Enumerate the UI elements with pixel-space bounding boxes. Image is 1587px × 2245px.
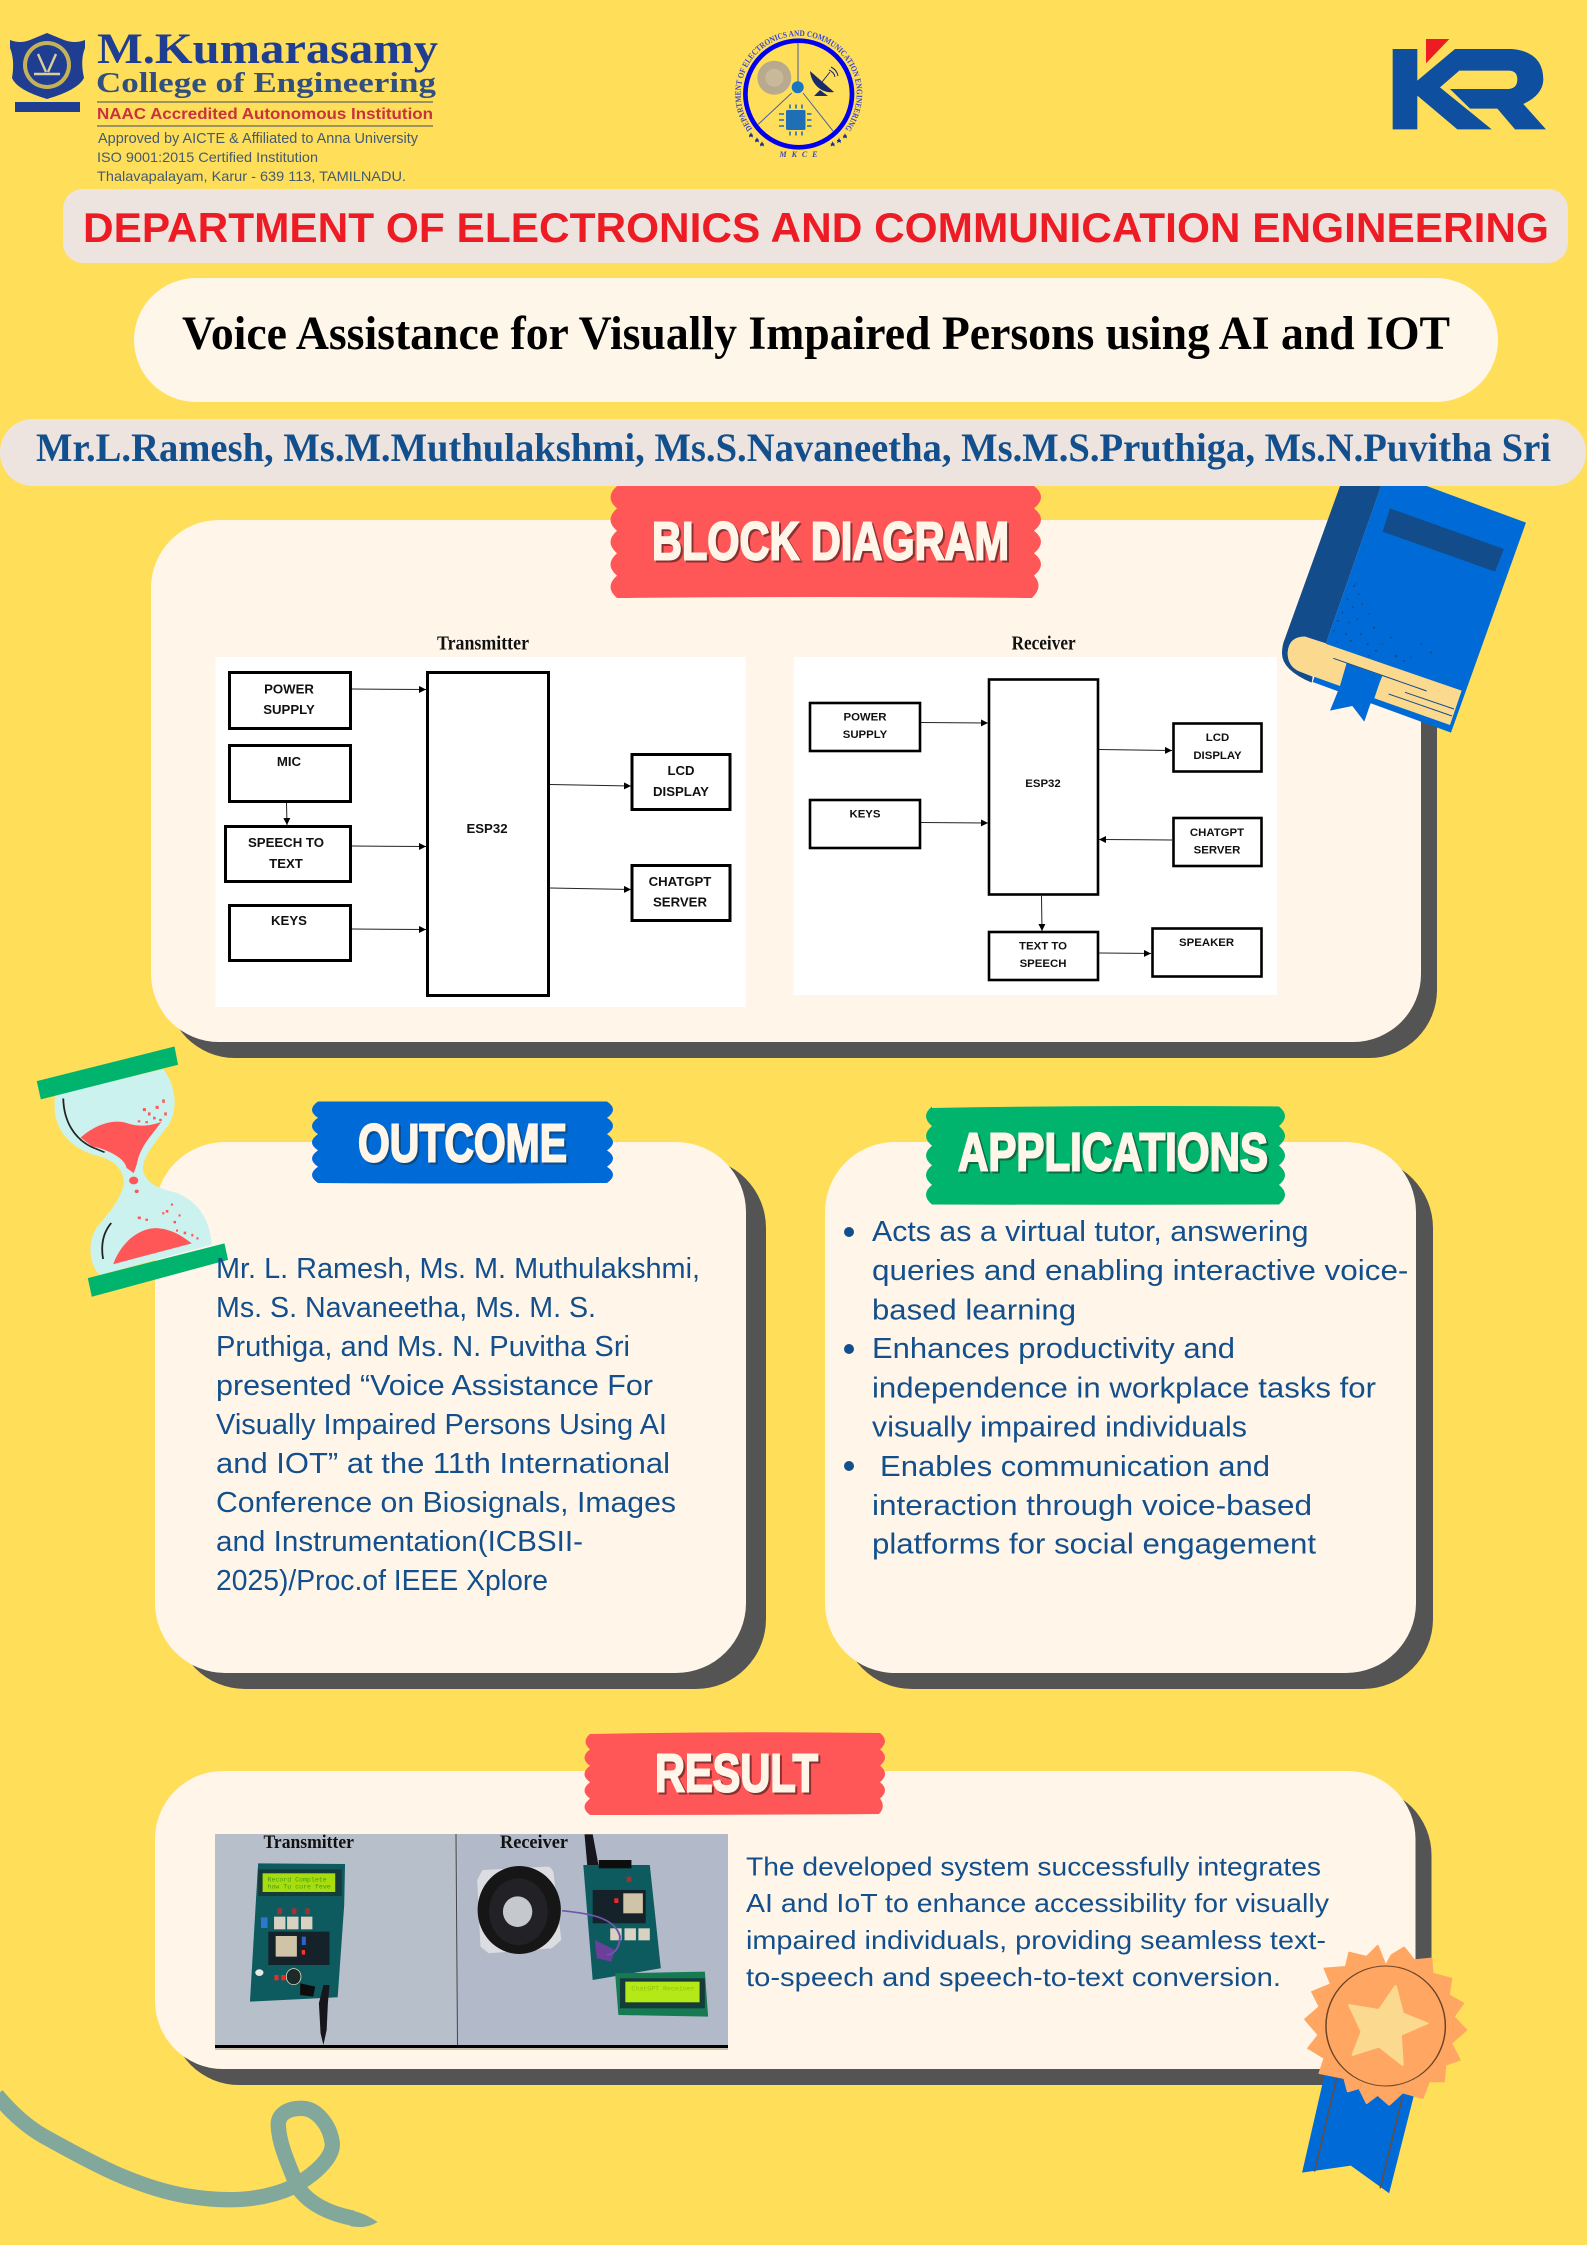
transmitter diagram: SERVER [653,894,707,910]
medal ribbon [1302,2075,1414,2193]
receiver diagram: SUPPLY [843,729,888,741]
college name block [96,26,439,184]
college name block: M.Kumarasamy [97,26,439,73]
transmitter diagram: ESP32 [466,821,508,836]
applications heading: APPLICATIONS [958,1123,1268,1183]
transmitter diagram: POWER [264,682,314,696]
transmitter diagram: SPEECH TO [248,835,324,850]
result text: The developed system successfully integrates [746,1852,1321,1882]
receiver diagram: SERVER [1194,845,1240,857]
college name block: Approved by AICTE & Affiliated to Anna University [98,131,419,147]
photo: speaker [477,1866,561,1954]
outcome text: 2025)/Proc.of IEEE Xplore [216,1565,548,1597]
photo: receiver board [562,1834,708,2017]
college name block: ISO 9001:2015 Certified Institution [97,149,318,165]
transmitter diagram: SUPPLY [263,702,315,717]
icon: hourglass [37,1046,228,1297]
receiver diagram: SPEECH [1020,958,1066,970]
outcome text: Visually Impaired Persons Using AI [216,1409,667,1441]
panel: result [155,1771,1432,2085]
department banner [63,189,1568,263]
transmitter diagram: DISPLAY [653,784,709,799]
outcome text: Conference on Biosignals, Images [216,1487,676,1519]
transmitter label: Transmitter [437,634,529,654]
icon: college crest [10,33,85,112]
outcome text: Mr. L. Ramesh, Ms. M. Muthulakshmi, [216,1253,700,1285]
receiver diagram: LCD [1206,732,1229,744]
applications list: Acts as a virtual tutor, answering [872,1216,1308,1248]
transmitter diagram: KEYS [271,913,307,928]
title: Voice Assistance for Visually Impaired Persons using AI and IOT [182,307,1450,360]
outcome text: Pruthiga, and Ms. N. Puvitha Sri [216,1331,630,1363]
decorative swirl ribbon [0,2095,378,2227]
transmitter diagram: TEXT [269,856,303,871]
transmitter diagram: LCD [667,763,695,778]
photo: transmitter board [250,1863,345,2045]
result text: AI and IoT to enhance accessibility for visually [746,1888,1329,1918]
applications list: interaction through voice-based [872,1490,1312,1522]
result photo: Receiver [500,1832,569,1853]
transmitter diagram: MIC [277,754,302,769]
receiver diagram: POWER [843,712,887,724]
receiver diagram: CHATGPT [1190,827,1244,839]
panel: applications [825,1142,1433,1689]
college name block: College of Engineering [96,67,437,99]
medal rosette [1305,1946,1466,2105]
block diagram heading [610,486,1041,598]
authors [0,419,1586,486]
result photo [215,1832,728,2050]
icon: KR logo [1393,39,1546,129]
applications heading [926,1106,1285,1205]
panel: outcome [155,1142,766,1689]
receiver diagram: SPEAKER [1179,937,1234,949]
outcome text [216,1253,700,1597]
transmitter diagram: CHATGPT [649,874,711,889]
result heading [584,1732,885,1815]
applications list: independence in workplace tasks for [872,1372,1376,1404]
department banner: DEPARTMENT OF ELECTRONICS AND COMMUNICATION ENGINEERING [83,204,1549,251]
outcome heading: OUTCOME [358,1113,567,1173]
icon: department seal: DEPARTMENT OF ELECTRONICS AND COMMUNICATION ENGINEERING [735,30,862,132]
outcome heading [312,1101,613,1184]
photo labels: Transmitter [264,1832,355,1853]
outcome text: and Instrumentation(ICBSII- [216,1526,583,1558]
applications list: platforms for social engagement [872,1528,1316,1560]
result text: to-speech and speech-to-text conversion. [746,1962,1281,1992]
applications list: queries and enabling interactive voice- [872,1255,1408,1287]
receiver diagram: TEXT TO [1019,940,1067,952]
applications list: Enhances productivity and [872,1333,1235,1365]
receiver label: Receiver [1012,634,1076,654]
applications list: visually impaired individuals [872,1412,1247,1444]
receiver diagram [794,657,1277,995]
photo: receiver board: ChatGPT Receiver [631,1986,695,1993]
receiver diagram: KEYS [849,808,881,820]
applications list [844,1216,1408,1560]
outcome text: and IOT” at the 11th International [216,1448,670,1480]
authors: Mr.L.Ramesh, Ms.M.Muthulakshmi, Ms.S.Navaneetha, Ms.M.S.Pruthiga, Ms.N.Puvitha Sri [36,425,1551,470]
panel: block diagram [151,486,1437,1058]
result heading: RESULT [655,1744,818,1804]
photo: transmitter board: Record Complete [268,1877,327,1884]
applications list: Enables communication and [880,1451,1270,1483]
receiver diagram: DISPLAY [1193,750,1242,762]
applications list: based learning [872,1295,1076,1327]
photo: transmitter board: how Tu cure feve [268,1884,331,1891]
icon: book [1282,486,1526,733]
icon: department seal: M K C E [778,150,818,159]
outcome text: presented “Voice Assistance For [216,1370,653,1402]
outcome text: Ms. S. Navaneetha, Ms. M. S. [216,1292,596,1324]
receiver diagram: ESP32 [1025,778,1061,790]
transmitter diagram [216,657,746,1007]
college name block: NAAC Accredited Autonomous Institution [97,106,433,123]
result text: impaired individuals, providing seamless text- [746,1925,1326,1955]
result text [746,1852,1329,1992]
title [134,278,1498,402]
block diagram heading: BLOCK DIAGRAM [652,512,1009,572]
college name block: Thalavapalayam, Karur - 639 113, TAMILNADU. [97,168,406,184]
icon: medal [1302,1946,1466,2193]
